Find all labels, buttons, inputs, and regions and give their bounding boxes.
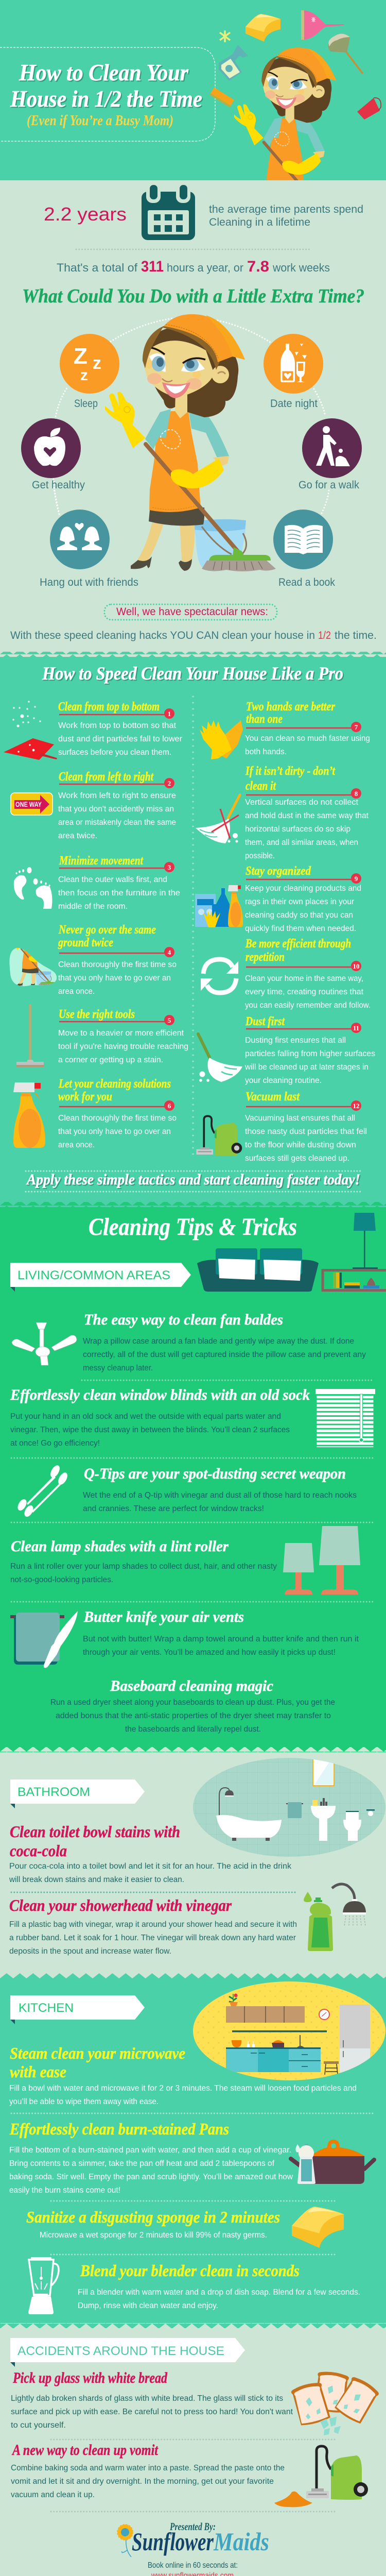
statement: you can: With these speed cleaning hacks YOU CAN clean your house in — [10, 630, 315, 641]
body: to cut yourself. — [11, 2421, 66, 2430]
body: Lightly dab broken shards of glass with white bread. The glass will stick to its — [11, 2394, 283, 2403]
label: sleep: Sleep — [74, 398, 98, 410]
heading: Baseboard cleaning magic — [110, 1677, 273, 1694]
rule and number badge: 3 — [168, 863, 171, 871]
body — [58, 1029, 188, 1064]
banner: bathroom: BATHROOM — [17, 1785, 90, 1799]
body: baking soda. Stir well. Empty the pan and scrub lightly. You’ll be amazed out how — [9, 2173, 293, 2181]
icon: repeat arrows — [201, 959, 238, 993]
circle: sleep: z — [93, 353, 101, 373]
body: Bring contents to a simmer, take the pan off heat and add 2 tablespoons of — [9, 2159, 275, 2168]
heading line 2: with ease — [10, 2062, 66, 2081]
icon: floating sponge — [245, 14, 280, 42]
icon: one way sign: ONE WAY — [15, 800, 42, 808]
heading: If it isn’t dirty - don’t — [245, 765, 336, 778]
rule and number badge — [59, 1015, 174, 1025]
body — [245, 1114, 367, 1163]
tip 2 — [58, 770, 176, 840]
icon: sunflower — [117, 2524, 133, 2557]
body: then focus on the furniture in the — [58, 889, 180, 897]
banner: living areas: LIVING/COMMON AREAS — [17, 1268, 170, 1282]
body: rags in their own places in your — [245, 897, 354, 906]
body: that you only have to go over an — [58, 1127, 171, 1136]
body: Move to a heavier or more efficient — [58, 1029, 184, 1038]
icon: sponge — [292, 2207, 344, 2248]
body: Clean your home in the same way, — [245, 974, 363, 983]
body: vacuum and clean it up. — [11, 2490, 95, 2499]
tip 3 — [58, 854, 180, 911]
heading line 2: repetition — [245, 951, 285, 964]
tip 10 — [245, 937, 371, 1010]
heading: extra time: What Could You Do with a Little Extra Time? — [22, 285, 364, 307]
rule and number badge: 12 — [353, 1102, 359, 1110]
icon: vacuum — [196, 1116, 242, 1156]
body: you can easily remember and follow. — [245, 1001, 371, 1010]
label: friends: Hang out with friends — [40, 577, 138, 588]
body — [9, 2084, 357, 2106]
body: through your air vents. You’ll be amazed and how easily it picks up dust! — [83, 1648, 336, 1657]
rule and number badge — [59, 778, 174, 788]
heading: Two hands are better — [246, 700, 336, 714]
heading: Q-Tips are your spot-dusting secret weapon — [84, 1465, 346, 1482]
body: and hold dust in the same way that — [245, 811, 369, 820]
body: Microwave a wet sponge for 2 minutes to kill 99% of nasty germs. — [40, 2231, 267, 2240]
body: you’ll be able to wipe them away with ease. — [9, 2097, 159, 2106]
body: possible. — [245, 852, 275, 860]
body: will break down stains and make it easier to clean. — [9, 1875, 184, 1884]
body: Clean thoroughly the first time so — [58, 1114, 177, 1123]
body: Keep your cleaning products and — [245, 884, 361, 893]
tip: burnt pans — [9, 2120, 293, 2195]
wordmark: Sunflower — [132, 2527, 214, 2556]
circle: sleep: Z — [74, 344, 87, 369]
tip: air vents — [83, 1608, 359, 1657]
heading: Clean from left to right — [59, 770, 154, 784]
callout: spectacular news: Well, we have spectacular news: — [116, 606, 268, 618]
body — [50, 1698, 335, 1734]
body: deposits in the spout and increase water flow. — [9, 1947, 171, 1956]
heading line 2: than one — [246, 713, 283, 726]
panel: hero background — [0, 0, 386, 180]
tip 8 — [245, 765, 369, 860]
banner: kitchen: KITCHEN — [19, 2001, 74, 2015]
label: date night: Date night — [270, 398, 318, 410]
stat: hours and weeks — [57, 258, 330, 275]
body: Wet the end of a Q-tip with vinegar and dust all of those hard to reach nooks — [83, 1491, 357, 1500]
body: Fill a bowl with water and microwave it for 2 or 3 minutes. The steam will loosen food particles and — [9, 2084, 357, 2093]
body: But not with butter! Wrap a damp towel around a butter knife and then run it — [83, 1635, 359, 1643]
body — [244, 1036, 375, 1085]
icon: spray bottle — [219, 45, 248, 81]
tip 9 — [245, 865, 361, 933]
heading line 2: clean it — [245, 779, 276, 793]
tip: broken glass — [11, 2369, 293, 2430]
body — [245, 884, 361, 933]
tip 7 — [245, 700, 370, 756]
icon: shower head — [332, 1884, 366, 1926]
zigzag edge: speed clean — [0, 652, 386, 657]
title frame — [0, 47, 215, 141]
body: Run a lint roller over your lamp shades to collect dust, hair, and other nasty — [10, 1562, 277, 1571]
body: to the floor while dusting down — [245, 1141, 356, 1149]
body: Pour coca-cola into a toilet bowl and let it sit for an hour. The acid in the drink — [9, 1862, 291, 1871]
label: get healthy: Get healthy — [32, 479, 85, 491]
illustration: kitchen — [193, 1981, 386, 2080]
heading: Sanitize a disgusting sponge in 2 minutes — [26, 2208, 280, 2226]
rule and number badge — [246, 1100, 361, 1111]
icon: pot and shaker — [291, 2140, 374, 2184]
zigzag edge: tips — [0, 1202, 386, 1207]
tip: toilet bowl — [9, 1822, 291, 1884]
rule and number badge — [246, 722, 361, 732]
icon: spray bottle orange — [13, 1082, 45, 1148]
body: Put your hand in an old sock and wet the outside with equal parts water and — [10, 1412, 281, 1421]
body — [9, 1862, 291, 1884]
body: middle of the room. — [58, 902, 128, 911]
tip: sponge — [26, 2208, 280, 2240]
tip: baseboards — [50, 1677, 335, 1734]
heading: Butter knife your air vents — [83, 1608, 244, 1625]
panel: intro light background — [0, 180, 386, 657]
heading: The easy way to clean fan baldes — [84, 1311, 283, 1328]
body: area or mistakenly clean the same — [58, 818, 176, 827]
body — [58, 960, 177, 996]
circle: get healthy — [21, 418, 81, 478]
icon: cleaning products — [195, 885, 243, 927]
icon: asterisk sparkle — [220, 30, 230, 42]
body: quickly find them when needed. — [245, 924, 356, 933]
body: Vacuuming last ensures that all — [245, 1114, 355, 1123]
stat: hours and weeks: 7.8 — [247, 258, 269, 275]
illustration: sofa — [197, 1248, 319, 1292]
heading: cleaning tips and tricks: Cleaning Tips & Tricks — [89, 1213, 297, 1241]
body: correctly, all of the dust will get captured inside the pillow case and prevent any — [83, 1350, 366, 1359]
body: Dusting first ensures that all — [245, 1036, 346, 1045]
body: surfaces before you clean them. — [58, 748, 171, 757]
body — [10, 1412, 290, 1448]
body: Clean the outer walls first, and — [58, 875, 167, 884]
circle: sleep — [60, 334, 119, 394]
body: area once. — [58, 987, 95, 996]
icon: window blinds — [315, 1389, 375, 1447]
icon: broom — [16, 1004, 44, 1067]
icon: bread slices and glass — [290, 2370, 381, 2435]
body: added bonus that the anti-static properties of the dryer sheet may transfer to — [56, 1711, 331, 1720]
dotted arc connecting activities — [52, 318, 329, 514]
icon: footprints — [14, 867, 52, 909]
body: messy cleanup later. — [83, 1364, 153, 1372]
icon: one way sign — [11, 793, 52, 815]
rule and number badge: 8 — [355, 790, 358, 798]
banner: accidents: ACCIDENTS AROUND THE HOUSE — [17, 2344, 224, 2358]
heading: Vacuum last — [245, 1090, 300, 1104]
icon: rubber gloves — [200, 720, 243, 759]
heading: Blend your blender clean in seconds — [80, 2261, 300, 2280]
zigzag edge: kitchen — [0, 1973, 386, 1978]
tip 6 — [58, 1077, 177, 1149]
tip: microwave — [9, 2044, 357, 2106]
body: Vertical surfaces do not collect — [245, 798, 359, 807]
stat description: Cleaning in a lifetime — [209, 216, 310, 228]
body: a corner or getting up a stain. — [58, 1056, 163, 1064]
body — [245, 798, 369, 860]
rule and number badge — [246, 788, 361, 799]
statement: you can: the time. — [335, 630, 377, 641]
zigzag edge: bathroom — [0, 1747, 386, 1752]
icon: duster — [198, 1034, 242, 1082]
zigzag edge: accidents — [0, 2323, 386, 2328]
body: that you don't accidently miss an — [58, 805, 174, 814]
body — [83, 1337, 366, 1372]
icon: crossed out duster — [196, 795, 240, 843]
body: cleaning caddy so that you can — [245, 911, 353, 920]
icon: calendar — [142, 185, 195, 240]
presented by logo — [117, 2520, 269, 2557]
heading: Clean toilet bowl stains with — [10, 1822, 180, 1841]
heading: Be more efficient through — [245, 937, 351, 951]
icon: squeegee — [301, 10, 344, 40]
heading: Effortlessly clean window blinds with an old sock — [10, 1386, 310, 1403]
heading: Clean your showerhead with vinegar — [9, 1896, 232, 1914]
rule and number badge — [59, 708, 174, 719]
circle: sleep: z — [80, 367, 88, 384]
rule and number badge — [246, 961, 361, 971]
illustration: hero woman — [234, 47, 337, 180]
icon: dustpan with dust — [4, 701, 57, 760]
circle: go for a walk — [302, 418, 362, 478]
panel: accidents background — [0, 2328, 386, 2576]
body — [58, 721, 182, 757]
body: area once. — [58, 1141, 95, 1149]
rule and number badge: 4 — [168, 948, 171, 956]
body: Run a used dryer sheet along your baseboards to clean up dust. Plus, you get the — [50, 1698, 335, 1707]
contact details: Book online in 60 seconds at: — [148, 2561, 238, 2570]
body: dust and dirt particles fall to lower — [58, 735, 182, 743]
tip: blender — [78, 2261, 360, 2310]
body — [83, 1491, 357, 1513]
heading: Minimize movement — [59, 854, 144, 868]
body: not-so-good-looking particles. — [10, 1575, 113, 1584]
circle: read a book — [273, 510, 333, 569]
subtitle: (Even if You’re a Busy Mom) — [27, 112, 173, 129]
body: horizontal surfaces do so skip — [245, 825, 350, 834]
rule and number badge — [59, 1100, 174, 1111]
banner: living areas — [10, 1263, 191, 1292]
stat description — [209, 204, 363, 228]
tip 11 — [244, 1015, 375, 1085]
rule and number badge: 7 — [355, 723, 358, 731]
tip 5 — [58, 1008, 188, 1064]
contact details — [148, 2561, 238, 2576]
heading: Steam clean your microwave — [10, 2044, 185, 2062]
body — [11, 2464, 285, 2499]
body: particles falling from higher surfaces — [245, 1049, 375, 1058]
body — [245, 734, 370, 756]
callout: spectacular news — [104, 604, 277, 620]
body — [58, 1114, 177, 1149]
body: Fill a blender with warm water and a drop of dish soap. Blend for a few seconds. — [78, 2288, 360, 2297]
heading: Clean lamp shades with a lint roller — [11, 1538, 229, 1555]
rule and number badge — [246, 1023, 361, 1033]
body: that you only have to go over an — [58, 974, 171, 982]
heading: Dust first — [245, 1015, 285, 1028]
rule and number badge: 1 — [168, 710, 171, 718]
banner: bathroom — [10, 1780, 145, 1808]
rule and number badge — [59, 947, 174, 957]
body: Fill the bottom of a burn-stained pan with water, and then add a cup of vinegar. — [9, 2146, 291, 2155]
heading line 2: ground twice — [58, 936, 113, 950]
body — [9, 1920, 297, 1956]
body: Clean thoroughly the first time so — [58, 960, 177, 969]
heading: Pick up glass with white bread — [12, 2369, 168, 2386]
icon: q-tips — [16, 1464, 69, 1518]
label: read a book: Read a book — [278, 577, 335, 588]
stat: hours and weeks: That's a total of — [57, 261, 138, 274]
panel: kitchen background — [0, 1978, 386, 2328]
heading line 2: coca-cola — [10, 1841, 67, 1860]
heading: Use the right tools — [59, 1008, 135, 1021]
icon: blender — [28, 2257, 59, 2314]
body: surfaces still gets cleaned up. — [245, 1154, 349, 1163]
rule and number badge: 11 — [353, 1024, 359, 1032]
illustration: shelf — [323, 1270, 386, 1290]
body: your cleaning routine. — [245, 1076, 322, 1085]
icon: small scrub sponge — [209, 88, 234, 108]
stat: years: 2.2 years — [44, 204, 127, 225]
body: vomit and let it sit and dry overnight. In the morning, get out your favorite — [11, 2477, 274, 2486]
tip: q-tips — [83, 1465, 357, 1513]
heading: Effortlessly clean burn-stained Pans — [9, 2120, 229, 2138]
body: Dump, rinse with clean water and enjoy. — [78, 2301, 218, 2310]
heading: Let your cleaning solutions — [58, 1077, 171, 1091]
heading line 2: work for you — [58, 1090, 112, 1104]
heading: Never go over the same — [58, 923, 156, 937]
statement: you can: 1/2 — [318, 630, 331, 641]
body: easily the burn stains come out! — [9, 2186, 120, 2195]
icon: table lamps — [283, 1526, 360, 1595]
rule and number badge: 5 — [168, 1016, 171, 1024]
body: will be cleaned up at later stages in — [244, 1063, 369, 1072]
body: area twice. — [58, 832, 97, 840]
icon: woman in blob — [9, 948, 57, 986]
body — [10, 1562, 277, 1584]
panel: tips and tricks background — [0, 1207, 386, 1752]
presented by logo: Maids — [213, 2527, 269, 2556]
body: them, and all similar areas, when — [245, 838, 358, 847]
illustration: floor lamp — [353, 1213, 378, 1269]
title — [10, 59, 202, 129]
body: the baseboards and literally repel dust. — [125, 1725, 261, 1734]
body — [83, 1635, 359, 1657]
closing line: apply tactics: Apply these simple tactics and start cleaning faster today! — [26, 1171, 360, 1188]
label: go for a walk: Go for a walk — [299, 479, 359, 491]
presented by: Presented By: — [169, 2520, 216, 2533]
rule and number badge: 6 — [168, 1102, 171, 1110]
banner: kitchen — [10, 1995, 145, 2024]
icon: red bucket — [357, 98, 381, 120]
icon: feather duster — [328, 33, 363, 74]
body: Work from top to bottom so that — [58, 721, 177, 730]
stat: hours and weeks: work weeks — [272, 261, 330, 274]
body: Work from left to right to ensure — [58, 791, 176, 800]
body: Fill a plastic bag with vinegar, wrap it around your shower head and secure it with — [9, 1920, 297, 1929]
icon: vinegar bottle — [304, 1892, 333, 1951]
heading: speed clean: How to Speed Clean Your House Like a Pro — [42, 663, 343, 684]
body: vinegar. Then, wipe the dust away in between the blinds. You’ll clean 2 surfaces — [10, 1426, 290, 1434]
stat: hours and weeks: 311 — [141, 258, 164, 275]
body: and crannies. These are perfect for window tracks! — [83, 1504, 264, 1513]
heading: Stay organized — [245, 865, 311, 878]
illustration: woman with mop — [105, 314, 276, 571]
body: You can clean so much faster using — [245, 734, 370, 743]
heading: A new way to clean up vomit — [11, 2442, 159, 2459]
tip: vomit — [11, 2442, 285, 2499]
rule and number badge: 10 — [353, 962, 359, 970]
illustration: bathroom — [193, 1757, 386, 1857]
icon: vacuum and powder pile — [274, 2446, 368, 2507]
rule and number badge: 9 — [355, 875, 358, 883]
heading: Clean from top to bottom — [58, 700, 160, 714]
rule and number badge — [59, 862, 174, 872]
body — [11, 2394, 293, 2430]
tip 4 — [58, 923, 177, 996]
banner: accidents — [10, 2338, 245, 2367]
body: every time, creating routines that — [245, 988, 364, 996]
rule and number badge — [246, 873, 361, 884]
body — [78, 2288, 360, 2310]
tip: fan blades — [83, 1311, 366, 1372]
tip: lamp shades — [10, 1538, 277, 1584]
body: a rubber band. Let it soak for 1 hour. The vinegar will break down any hard water — [9, 1934, 296, 1942]
body — [245, 974, 371, 1010]
body — [58, 875, 180, 911]
panel: bathroom background — [0, 1752, 386, 1978]
tip 1 — [58, 700, 182, 757]
stat description: the average time parents spend — [209, 204, 363, 215]
title: How to Clean Your — [19, 59, 189, 86]
tip: showerhead — [9, 1896, 297, 1956]
body: Wrap a pillow case around a fan blade and gently wipe away the dust. If done — [83, 1337, 354, 1346]
panel: speed clean background — [0, 657, 386, 1207]
body — [9, 2146, 293, 2195]
body: Combine baking soda and warm water into a paste. Spread the paste onto the — [11, 2464, 285, 2472]
body: those nasty dust particles that fell — [245, 1127, 367, 1136]
rule and number badge: 2 — [168, 779, 171, 787]
tip: window blinds — [10, 1386, 310, 1448]
body — [58, 791, 176, 840]
icon: ceiling fan — [12, 1323, 77, 1365]
circle: friends — [50, 510, 110, 569]
stat: hours and weeks: hours a year, or — [167, 261, 243, 274]
circle: date night — [264, 334, 323, 394]
body: tool if you're having trouble reaching — [58, 1042, 188, 1051]
title: House in 1/2 the Time — [10, 86, 202, 112]
body: at once! Go go efficiency! — [10, 1439, 100, 1448]
icon: towel and butter knife — [10, 1611, 78, 1668]
body: surface and pick up with ease. Be careful not to press too hard! You don't want — [11, 2408, 293, 2416]
body: both hands. — [245, 748, 287, 756]
tip 12 — [245, 1090, 367, 1163]
